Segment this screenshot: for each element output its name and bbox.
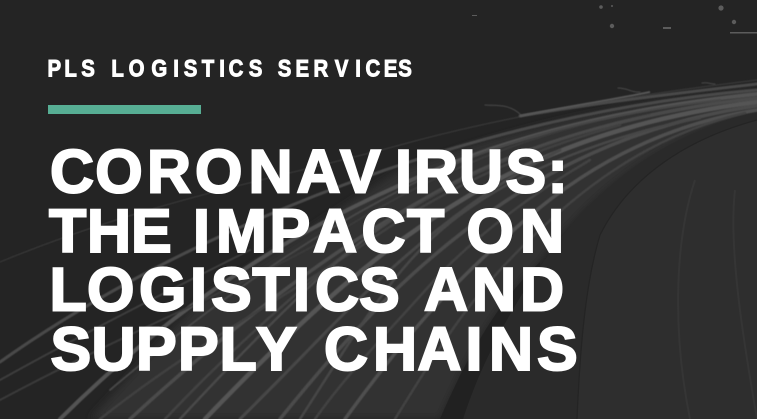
road surface	[577, 120, 757, 419]
title	[49, 138, 578, 383]
barrier seam	[577, 120, 757, 419]
title line 4: SUPPLY CHAINS	[50, 315, 578, 383]
headlight streak	[520, 92, 650, 116]
accent bar	[48, 105, 201, 114]
subtitle: PLS LOGISTICS SERVICES	[48, 55, 412, 82]
title line 3: LOGISTICS AND	[50, 256, 564, 324]
title line 1: CORONAVIRUS:	[50, 138, 568, 206]
distant street lights	[472, 5, 757, 34]
title line 2: THE IMPACT ON	[49, 197, 564, 265]
concrete barrier	[463, 112, 757, 419]
soft fan of light under the trails	[90, 90, 757, 419]
road lane markings	[678, 180, 757, 419]
dark band beside barrier	[440, 262, 540, 419]
